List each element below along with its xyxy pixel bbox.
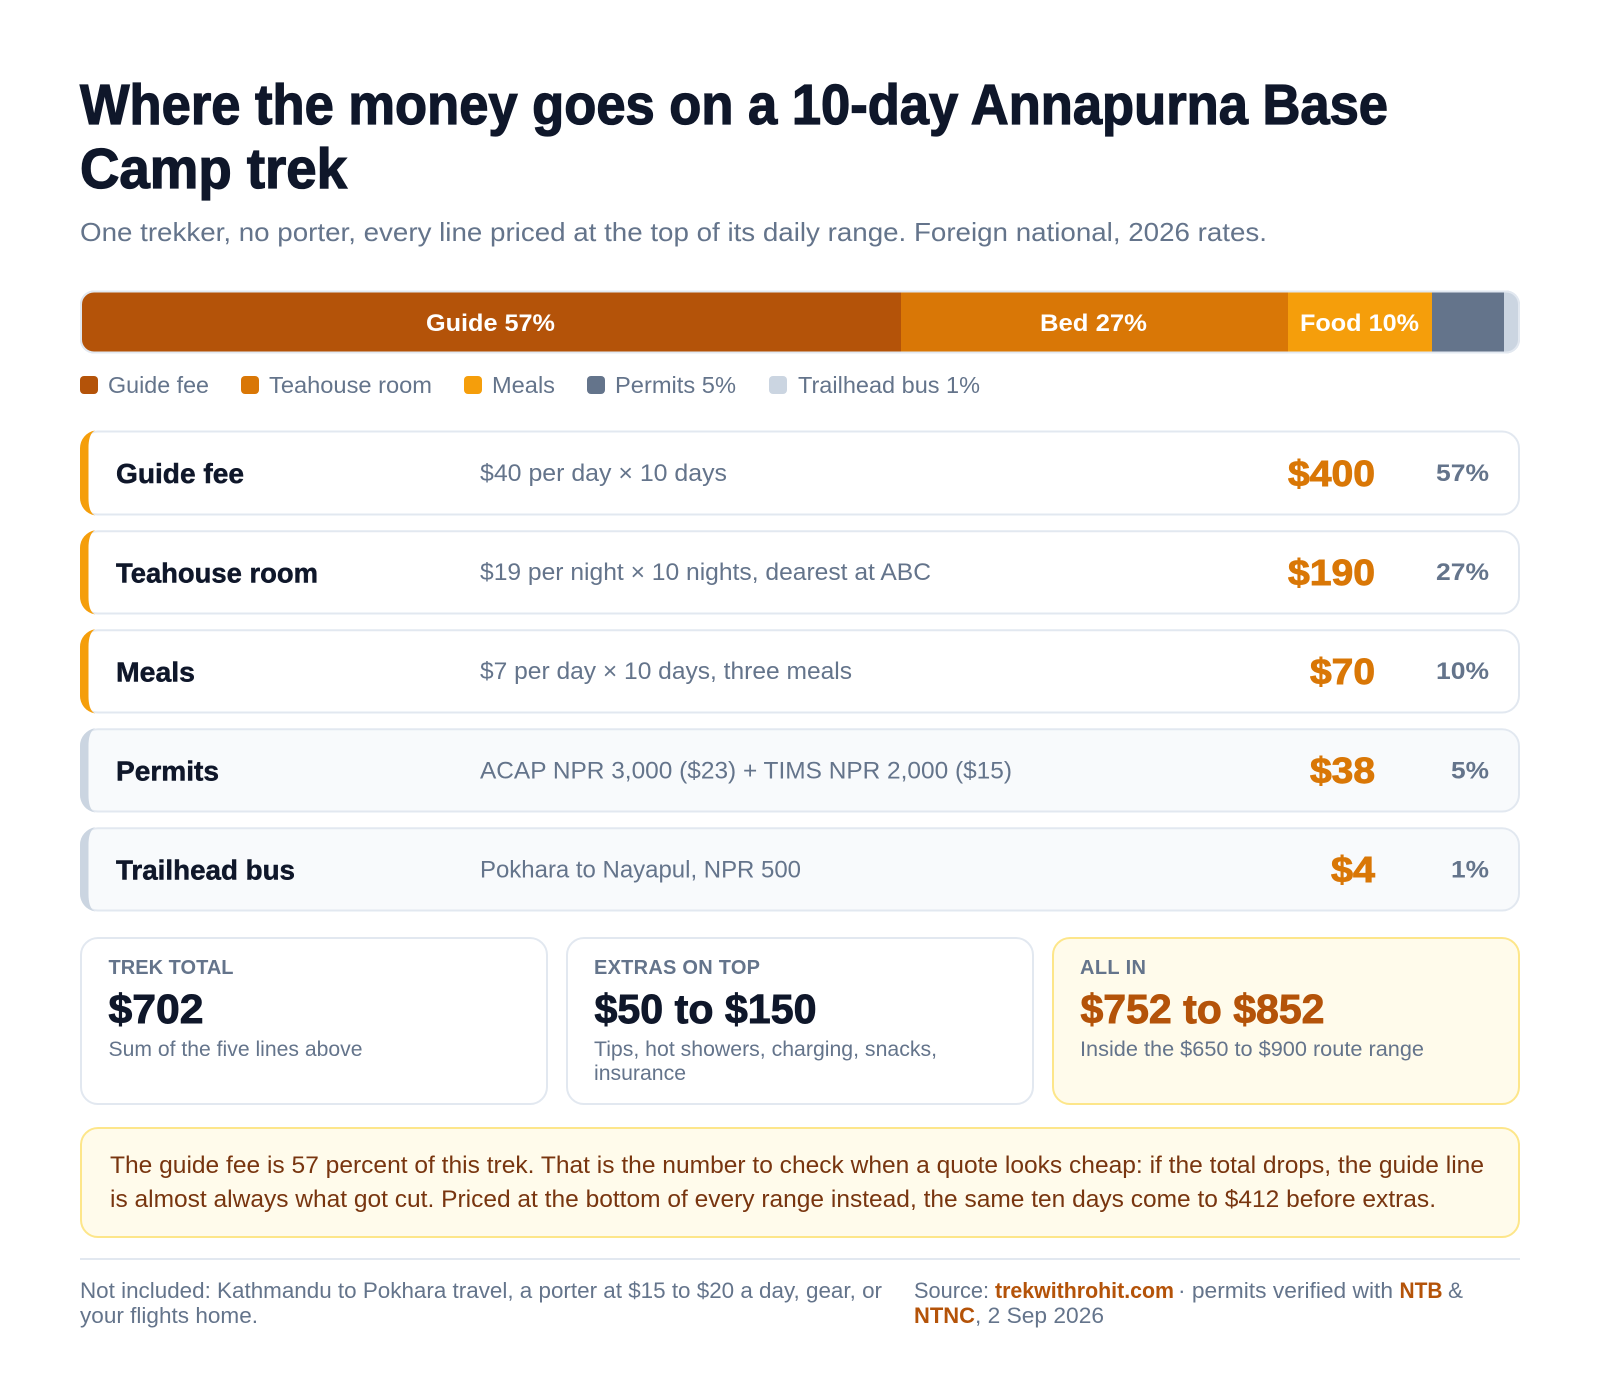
footnote: source: · permits verified with <box>1178 1278 1393 1303</box>
row detail: ACAP NPR 3,000 ($23) + TIMS NPR 2,000 ($15) <box>480 758 1012 785</box>
card value: $752 to $852 <box>1080 986 1324 1032</box>
row detail: Pokhara to Nayapul, NPR 500 <box>480 857 801 884</box>
bar label: guide: Guide 57% <box>426 310 555 337</box>
legend item: guide fee: Guide fee <box>108 372 209 398</box>
card label: EXTRAS ON TOP <box>594 957 760 979</box>
row amount: $38 <box>1310 750 1375 791</box>
card label: ALL IN <box>1080 957 1146 979</box>
legend item: meals <box>464 372 555 398</box>
bar label: food: Food 10% <box>1300 310 1419 337</box>
row share: 57% <box>1436 460 1489 487</box>
row detail: $40 per day × 10 days <box>480 460 727 487</box>
card note: Inside the $650 to $900 route range <box>1080 1038 1424 1061</box>
footnote: not included: Not included: Kathmandu to Pokhara travel, a porter at $15 to $20 a day, gear, or <box>80 1278 882 1303</box>
row share: 1% <box>1451 857 1489 884</box>
card value: $702 <box>108 986 204 1032</box>
row: trailhead bus <box>80 827 1519 912</box>
legend item: meals: Meals <box>492 372 555 398</box>
row amount: $4 <box>1331 849 1375 890</box>
footnote: source: trekwithrohit.com <box>995 1278 1174 1303</box>
footnote: source <box>914 1278 1463 1328</box>
row amount: $190 <box>1288 552 1375 593</box>
row: teahouse room <box>80 530 1519 614</box>
row: guide fee <box>80 430 1519 516</box>
footnote: not included <box>80 1278 882 1328</box>
row amount: $400 <box>1288 453 1375 494</box>
title: Where the money goes on a 10-day Annapurna Base <box>80 73 1388 137</box>
row detail: $19 per night × 10 nights, dearest at ABC <box>480 559 931 586</box>
segment: bed 27% <box>901 292 1288 352</box>
row name: Trailhead bus <box>116 854 295 886</box>
footnote: source: Source: <box>914 1278 989 1303</box>
card: extras on top <box>567 938 1033 1104</box>
row name: Meals <box>116 656 195 688</box>
segment: bus 1% <box>1504 292 1518 352</box>
title: Camp trek <box>80 137 347 201</box>
footnote: source: , 2 Sep 2026 <box>975 1303 1104 1328</box>
row detail: $7 per day × 10 days, three meals <box>480 658 852 685</box>
card note: insurance <box>594 1062 686 1085</box>
card: trek total <box>81 938 547 1104</box>
row share: 27% <box>1436 559 1489 586</box>
row name: Guide fee <box>116 458 244 489</box>
card note: Tips, hot showers, charging, snacks, <box>594 1038 937 1061</box>
card note: Sum of the five lines above <box>108 1038 362 1061</box>
title <box>80 73 1388 201</box>
row amount: $70 <box>1310 651 1375 692</box>
card note <box>594 1038 937 1085</box>
footnote: source: & <box>1448 1278 1463 1303</box>
row share: 5% <box>1451 758 1489 785</box>
row: meals <box>80 629 1519 714</box>
card label: TREK TOTAL <box>108 957 234 979</box>
subtitle: One trekker, no porter, every line priced at the top of its daily range. Foreign national, 2026 rates. <box>80 217 1267 247</box>
legend <box>80 372 980 398</box>
row share: 10% <box>1436 658 1489 685</box>
card value: $50 to $150 <box>594 986 816 1032</box>
callout: The guide fee is 57 percent of this trek. That is the number to check when a quote looks cheap: if the total drops, the guide line <box>110 1152 1484 1179</box>
legend item: trailhead bus: Trailhead bus 1% <box>798 372 980 398</box>
segment: food 10% <box>1288 292 1432 352</box>
stacked cost share bar <box>80 290 1520 354</box>
legend item: permits: Permits 5% <box>615 372 736 398</box>
card: all in <box>1053 938 1519 1104</box>
segment: guide 57% <box>82 292 901 352</box>
footnote: source: NTNC <box>914 1303 975 1328</box>
callout <box>81 1128 1519 1237</box>
row name: Permits <box>116 756 219 786</box>
legend item: teahouse room: Teahouse room <box>269 372 432 398</box>
row name: Teahouse room <box>116 558 318 588</box>
row: permits <box>80 728 1519 812</box>
footnote: source: NTB <box>1400 1278 1442 1303</box>
callout: is almost always what got cut. Priced at the bottom of every range instead, the same ten days come to $412 before extras. <box>110 1186 1436 1213</box>
bar label: bed: Bed 27% <box>1040 310 1147 337</box>
segment: permits 5% <box>1432 292 1504 352</box>
footnote: not included: your flights home. <box>80 1303 258 1328</box>
